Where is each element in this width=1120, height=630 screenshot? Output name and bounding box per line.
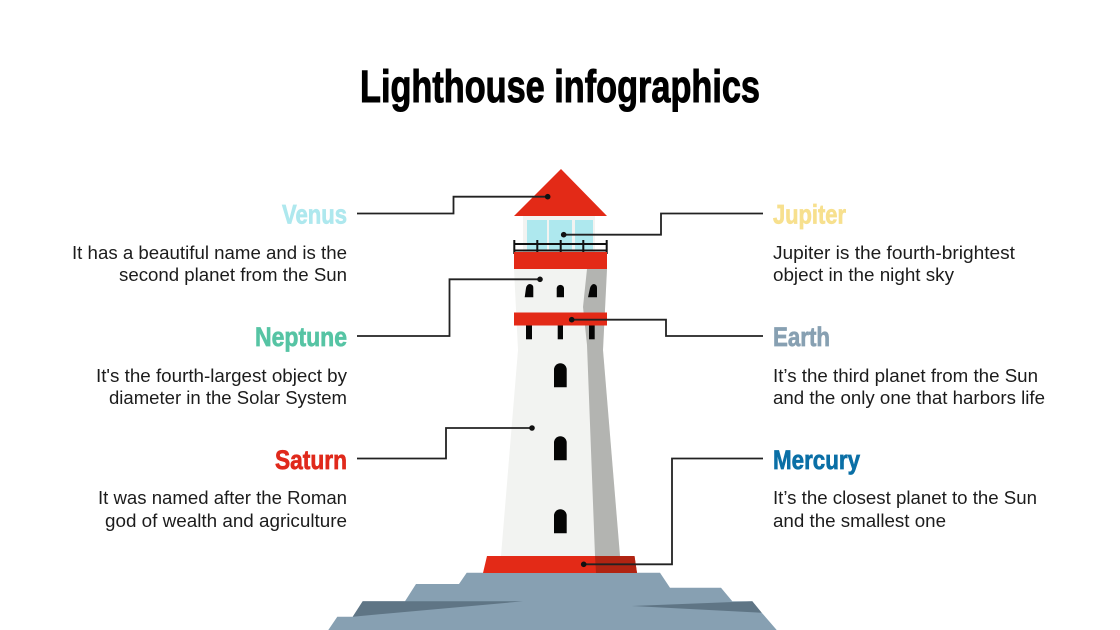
text block: Jupiter: Jupiter is the fourth-brightest [773,243,1015,263]
text block: Jupiter: Jupiter [773,200,846,230]
text block: Saturn [98,445,347,531]
text block: Earth: Earth [773,322,830,352]
lighthouse illustration [328,169,777,630]
connector: Neptune [357,276,543,336]
text block: Venus [72,200,347,285]
text block: Neptune: diameter in the Solar System [109,388,347,408]
text block: Saturn: It was named after the Roman [98,488,347,508]
rocks [328,573,777,630]
text block: Neptune [96,322,347,408]
upper windows [525,284,597,297]
tower [501,269,620,556]
text block: Saturn: Saturn [275,445,347,475]
lower band posts [526,325,595,339]
text block: Jupiter [773,200,1015,285]
red middle band [514,312,607,326]
text block: Earth [773,322,1045,408]
roof [514,169,607,216]
text block: Neptune: Neptune [255,322,347,352]
text block: Mercury: Mercury [773,445,860,475]
text block: Venus: Venus [282,200,347,230]
connector: Jupiter [561,214,763,238]
text block: Venus: second planet from the Sun [119,265,347,285]
tower windows [554,363,567,533]
lantern room [523,216,595,252]
text block: Mercury [773,445,1037,531]
red gallery band [514,252,607,269]
base [483,556,637,573]
text block: Jupiter: object in the night sky [773,265,954,285]
text block: Mercury: It’s the closest planet to the Sun [773,488,1037,508]
connector: Mercury [581,458,763,567]
text block: Venus: It has a beautiful name and is the [72,243,347,263]
title: Lighthouse infographics [360,61,760,112]
text block: Earth: It’s the third planet from the Sun [773,366,1038,386]
railing [514,240,607,254]
connector: Venus [357,194,550,214]
text block: Earth: and the only one that harbors life [773,388,1045,408]
text block: Saturn: god of wealth and agriculture [105,511,347,531]
connector: Saturn [357,425,535,458]
text block: Mercury: and the smallest one [773,511,946,531]
text block: Neptune: It's the fourth-largest object by [96,366,347,386]
connector: Earth [569,317,763,336]
